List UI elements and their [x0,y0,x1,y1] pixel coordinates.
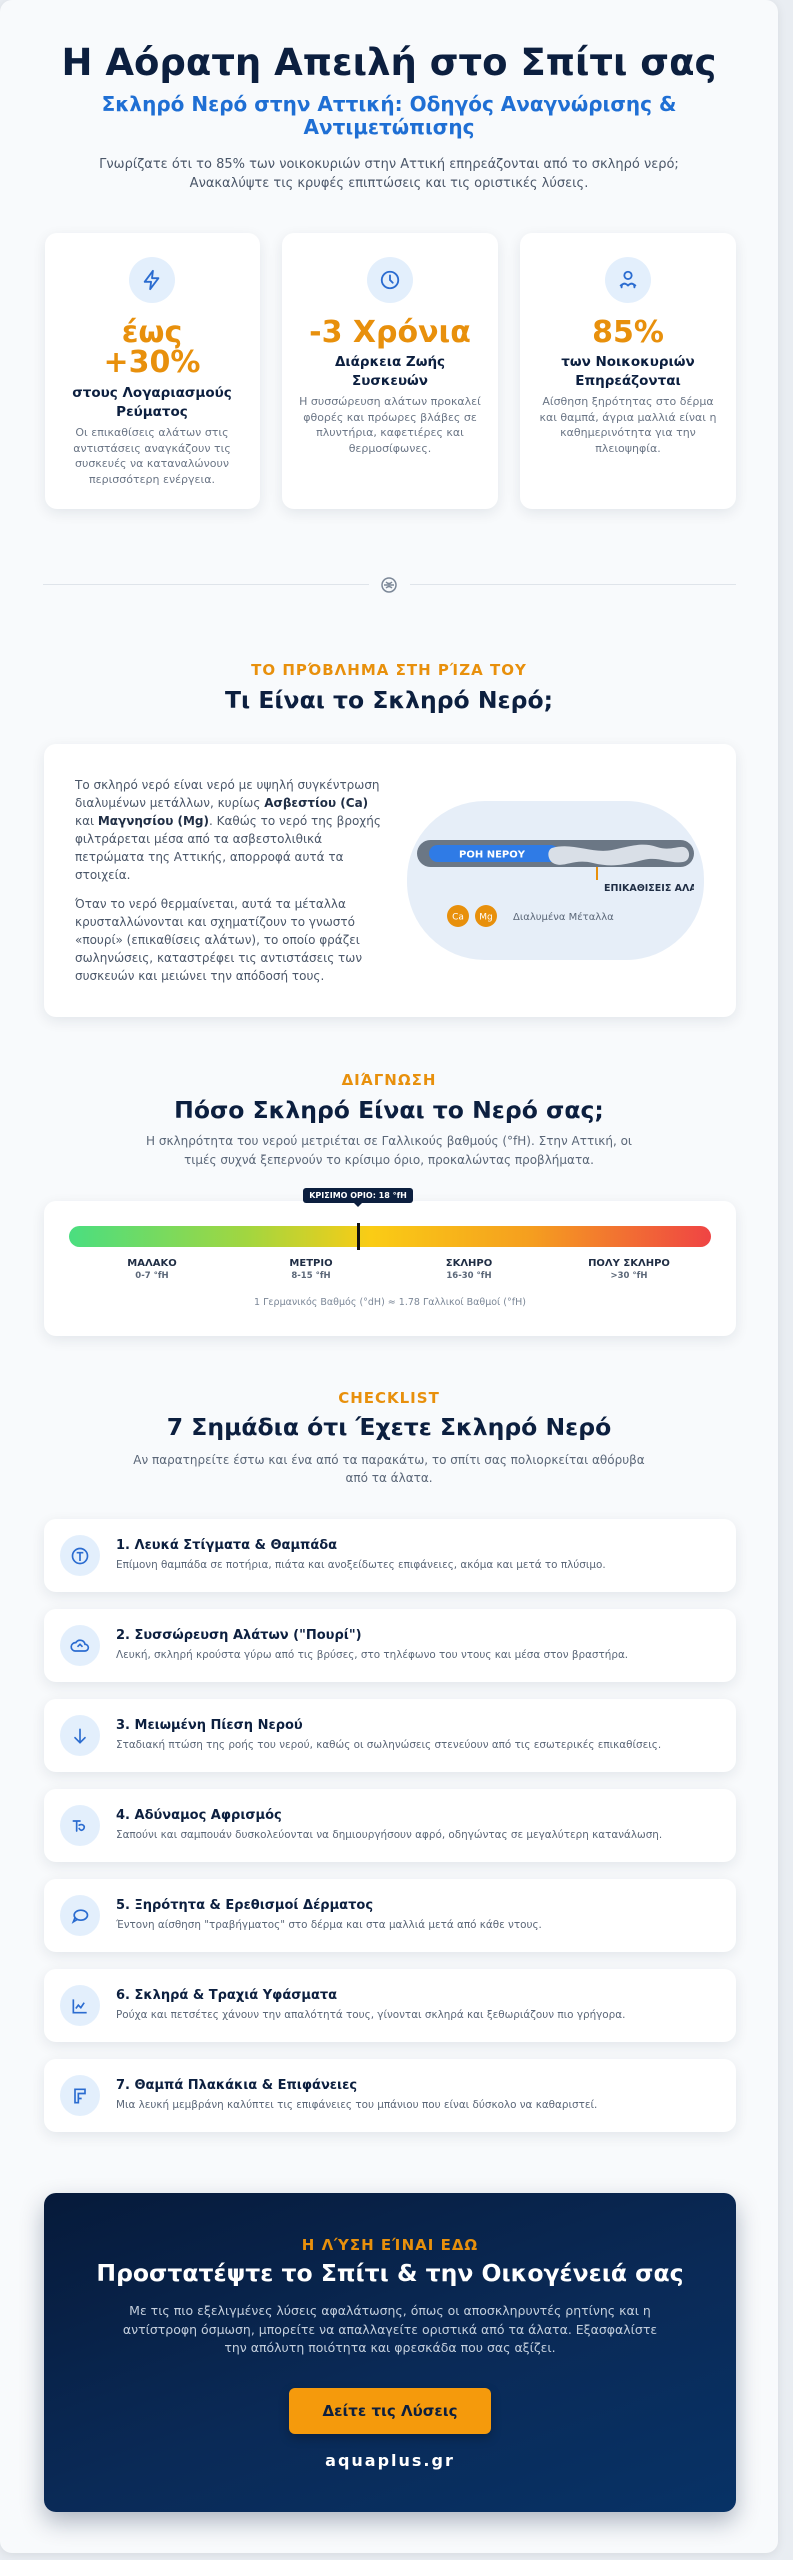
stat description [73,426,231,486]
item 3 [44,1699,736,1772]
text block: explanation: «πουρί» (επικαθίσεις αλάτων), το οποίο φράζει [75,933,360,947]
icon: lightning [129,257,175,303]
scale label: soft: ΜΑΛΑΚΟ [127,1258,177,1269]
tooltip: critical limit [303,1188,413,1203]
icon: arrow down [60,1715,100,1756]
item 4 [44,1789,736,1862]
icon: buildup [60,1625,100,1666]
stat number [104,315,200,380]
legend: dissolved metals: Ca [452,912,464,922]
text block: explanation: Όταν το νερό θερμαίνεται, αυτά τα μέταλλα [75,897,346,911]
cta heading: Προστατέψτε το Σπίτι & την Οικογένειά σας [96,2259,684,2287]
text block: explanation: φιλτράρεται μέσα από τα ασβεστολιθικά [75,832,322,846]
stat label: Ρεύματος [116,404,188,420]
section kicker: problem: ΤΟ ΠΡΌΒΛΗΜΑ ΣΤΗ ΡΊΖΑ ΤΟΥ [251,661,527,679]
text block: explanation: συσκευών και μειώνει την απόδοσή τους. [75,969,324,983]
intro text: Ανακαλύψτε τις κρυφές επιπτώσεις και τις οριστικές λύσεις. [190,176,588,190]
scale label: hard: 16-30 °fH [446,1271,492,1281]
stat description: συσκευές να καταναλώνουν [75,457,229,470]
stat description: περισσότερη ενέργεια. [89,473,215,486]
item 7: Μια λευκή μεμβράνη καλύπτει τις επιφάνειες του μπάνιου που είναι δύσκολο να καθαριστεί. [116,2099,597,2111]
pipe [417,840,694,867]
heading: how hard: Πόσο Σκληρό Είναι το Νερό σας; [174,1096,604,1124]
stat description: αντιστάσεις αναγκάζουν τις [73,442,231,455]
pipe: ΡΟΗ ΝΕΡΟΥ [459,850,526,860]
text: checklist description: από τα άλατα. [345,1471,433,1485]
diagram: pipe with scale [407,801,704,960]
gradient bar [69,1226,711,1247]
stat label: Επηρεάζονται [575,372,681,388]
item 3: 3. Μειωμένη Πίεση Νερού [116,1718,303,1733]
marker: critical limit [357,1223,360,1250]
item 6: 6. Σκληρά & Τραχιά Υφάσματα [116,1988,337,2003]
stat description [539,395,716,455]
item 5: Έντονη αίσθηση "τραβήγματος" στο δέρμα και στα μαλλιά μετά από κάθε ντους. [116,1919,542,1931]
item 1: Επίμονη θαμπάδα σε ποτήρια, πιάτα και ανοξείδωτες επιφάνειες, ακόμα και μετά το πλύσιμο. [116,1559,606,1571]
legend: dissolved metals [447,905,614,927]
stat label: στους Λογαριασμούς [72,384,232,400]
item 2 [44,1609,736,1682]
icon: spots [60,1535,100,1576]
scale label: very hard: >30 °fH [610,1271,647,1281]
cta text: την απόλυτη ποιότητα και φρεσκάδα που σας αξίζει. [224,2340,556,2355]
scale label: medium [289,1258,333,1281]
text block: explanation: στοιχεία. [75,868,130,882]
icon: tiles [60,2075,100,2116]
item 6 [44,1969,736,2042]
stat description: πλυντήρια, καφετιέρες και [316,426,464,439]
panel: stat energy [44,233,260,509]
note: conversion: 1 Γερμανικός Βαθμός (°dH) ≈ 1.78 Γαλλικοί Βαθμοί (°fH) [254,1297,526,1308]
intro text: Γνωρίζατε ότι το 85% των νοικοκυριών στην Αττική επηρεάζονται από το σκληρό νερό; [99,156,679,172]
cta text: αντίστροφη όσμωση, μπορείτε να απαλλαγείτε οριστικά από τα άλατα. Εξασφαλίστε [123,2322,657,2336]
scale label: medium: 8-15 °fH [291,1271,331,1281]
item 4: 4. Αδύναμος Αφρισμός [116,1808,282,1823]
text block: explanation [74,778,381,983]
item 3: Σταδιακή πτώση της ροής του νερού, καθώς οι σωληνώσεις στενεύουν από τις εσωτερικές επικαθίσεις. [116,1739,661,1751]
legend: dissolved metals: Mg [479,912,493,922]
text: checklist description [133,1453,645,1485]
website: aquaplus.gr [325,2451,455,2470]
stat description: πλειοψηφία. [595,442,661,455]
cta button: Δείτε τις Λύσεις [322,2402,458,2420]
text: checklist description: Αν παρατηρείτε έστω και ένα από τα παρακάτω, το σπίτι σας πολιορκείται αθόρυβα [133,1453,645,1467]
icon: divider emblem [381,577,397,593]
scale label: very hard [588,1258,670,1281]
stat description: φθορές και πρόωρες βλάβες σε [303,411,477,424]
stat label [72,384,232,420]
scale label: hard [446,1258,492,1281]
heading: what is hard water: Τι Είναι το Σκληρό Νερό; [225,686,553,714]
title: Η Αόρατη Απειλή στο Σπίτι σας [62,41,716,84]
icon: clock [367,257,413,303]
item 1: 1. Λευκά Στίγματα & Θαμπάδα [116,1538,337,1553]
stat label: Διάρκεια Ζωής [335,354,445,370]
section kicker: checklist: CHECKLIST [338,1389,440,1407]
text block: explanation: Το σκληρό νερό είναι νερό με υψηλή συγκέντρωση [75,778,380,792]
stat number: έως [122,315,182,350]
stat description: Οι επικαθίσεις αλάτων στις [75,426,229,439]
tooltip: critical limit: ΚΡΙΣΙΜΟ ΟΡΙΟ: 18 °fH [309,1191,407,1200]
subtitle: Σκληρό Νερό στην Αττική: Οδηγός Αναγνώρισης & [102,92,676,116]
legend: dissolved metals: Διαλυμένα Μέταλλα [513,911,614,923]
callout: scale deposits [596,867,694,891]
text block: explanation: διαλυμένων μετάλλων, κυρίως Ασβεστίου (Ca) [75,796,368,810]
stat description: Η συσσώρευση αλάτων προκαλεί [299,395,481,408]
item 4: Σαπούνι και σαμπουάν δυσκολεύονται να δημιουργήσουν αφρό, οδηγώντας σε μεγαλύτερη κατανάλωση. [116,1829,662,1841]
stat description [299,395,481,455]
stat description: Αίσθηση ξηρότητας στο δέρμα [542,395,714,408]
stat description: θερμοσίφωνες. [349,442,431,455]
subtitle [102,92,676,138]
text: diagnosis description: Η σκληρότητα του νερού μετριέται σε Γαλλικούς βαθμούς (°fH). Στην Αττική, οι [146,1134,632,1148]
stat label [335,354,445,388]
intro text [99,156,679,190]
stat label: των Νοικοκυριών [561,354,695,370]
stat label [561,354,695,388]
cta text [123,2303,657,2355]
stat label: Συσκευών [352,372,428,388]
stat number: -3 Χρόνια [309,315,471,350]
icon: skin [60,1895,100,1936]
stat description: και θαμπά, άγρια μαλλιά είναι η [539,411,716,424]
cta kicker: Η ΛΎΣΗ ΕΊΝΑΙ ΕΔΩ [302,2236,478,2254]
heading: 7 signs: 7 Σημάδια ότι Έχετε Σκληρό Νερό [167,1413,611,1441]
cta text: Με τις πιο εξελιγμένες λύσεις αφαλάτωσης, όπως οι αποσκληρυντές ρητίνης και η [129,2303,651,2318]
stat number: 85% [592,315,664,350]
scale label: soft [127,1258,177,1281]
icon: person [605,257,651,303]
stat number: +30% [104,345,200,380]
section kicker: diagnosis: ΔΙΆΓΝΩΣΗ [342,1071,436,1089]
subtitle: Αντιμετώπισης [304,114,474,138]
item 6: Ρούχα και πετσέτες χάνουν την απαλότητά τους, γίνονται σκληρά και ξεθωριάζουν πιο γρήγορα. [116,2009,625,2021]
icon: foam [60,1805,100,1846]
item 2: 2. Συσσώρευση Αλάτων ("Πουρί") [116,1628,362,1643]
panel: hardness scale [44,1201,736,1336]
text block: explanation: κρυσταλλώνονται και σχηματίζουν το γνωστό [75,915,355,929]
scale label: soft: 0-7 °fH [135,1271,169,1281]
scale label: very hard: ΠΟΛΥ ΣΚΛΗΡΟ [588,1258,670,1269]
text: diagnosis description [146,1134,632,1166]
panel: stat households [520,233,736,509]
item 5: 5. Ξηρότητα & Ερεθισμοί Δέρματος [116,1898,373,1913]
item 7 [44,2059,736,2132]
icon: chart [60,1985,100,2026]
item 7: 7. Θαμπά Πλακάκια & Επιφάνειες [116,2078,357,2093]
panel: explanation [44,744,736,1017]
text block: explanation: πετρώματα της Αττικής, απορροφά αυτά τα [75,850,343,864]
item 1 [44,1519,736,1592]
text block: explanation: και Μαγνησίου (Mg). Καθώς το νερό της βροχής [75,814,381,828]
text block: explanation: σωληνώσεις, καταστρέφει τις αντιστάσεις των [75,951,362,965]
item 5 [44,1879,736,1952]
cta button [289,2388,491,2434]
panel: stat lifetime [282,233,498,509]
scale label: hard: ΣΚΛΗΡΟ [446,1258,492,1269]
panel: call to action [44,2193,736,2512]
stat description: καθημερινότητα για την [560,426,696,439]
item 2: Λευκή, σκληρή κρούστα γύρω από τις βρύσες, στο τηλέφωνο του ντους και μέσα στον βραστήρα. [116,1649,628,1661]
text: diagnosis description: τιμές συχνά ξεπερνούν το κρίσιμο όριο, προκαλώντας προβλήματα. [184,1152,594,1166]
scale label: medium: ΜΕΤΡΙΟ [289,1258,333,1269]
